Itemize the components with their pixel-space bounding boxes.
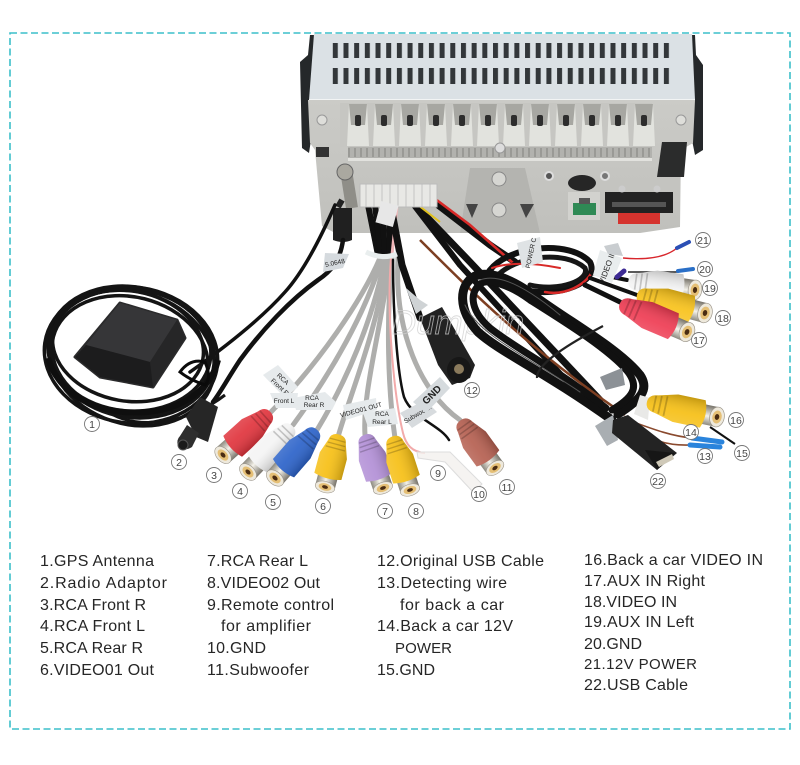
callout 11: 11: [502, 482, 513, 494]
callout 12: [464, 382, 480, 398]
GPS antenna: [32, 269, 232, 447]
rear panel: [308, 100, 695, 233]
legend column 3: 13.Detecting wire: [377, 575, 507, 592]
tag: RCA Rear R: [293, 392, 336, 410]
watermark: Dumpkin: [392, 304, 524, 342]
black ISO connector: [605, 186, 673, 224]
RCA plug: video 02: [379, 432, 425, 500]
callout 12: 12: [466, 385, 478, 397]
upper small cable loop: [490, 248, 637, 302]
tag: GND: GND: [421, 384, 444, 407]
legend column 4: 16.Back a car VIDEO IN: [584, 552, 763, 569]
callout 1: [84, 416, 100, 432]
tag: RCA Front L: Front L: [274, 398, 295, 405]
label: lead tag: 5.0648: [325, 258, 346, 269]
legend column 4: 18.VIDEO IN: [584, 594, 677, 611]
legend column 2: 8.VIDEO02 Out: [207, 575, 321, 592]
tag: RCA Rear R: RCA: [305, 395, 320, 402]
tag: VIDEO01 Out: VIDEO01 OUT: [339, 402, 383, 419]
legend column 1: 1.GPS Antenna: [40, 553, 154, 570]
tag: RCA Front R: Front R: [269, 377, 290, 398]
legend column 3: 12.Original USB Cable: [377, 553, 544, 570]
callout 14: 14: [685, 427, 697, 439]
callout 10: [472, 486, 486, 502]
side bracket right: [690, 35, 703, 155]
black harness from white connector: [368, 205, 397, 255]
callout 2: [172, 454, 186, 470]
RCA plug: front R: [209, 402, 280, 470]
cable coil: [32, 269, 232, 447]
tag: Subwoofer: [400, 400, 437, 428]
USB female connector: [612, 415, 677, 470]
legend column 2: 9.Remote control: [207, 597, 334, 614]
callout 17: [692, 332, 706, 348]
callout 3: 3: [211, 470, 217, 482]
cable tags on RCA leads: [263, 365, 437, 428]
callout 18: [716, 310, 730, 326]
callout 3: [206, 468, 222, 482]
legend column 2: 10.GND: [207, 640, 266, 657]
back-car wire 14: [628, 420, 722, 442]
callout 19: 19: [704, 283, 716, 295]
side bracket left: [300, 35, 314, 153]
radio adaptor plug: [177, 397, 218, 450]
red 12V wire: [623, 242, 689, 259]
back-car wire 13: [630, 425, 720, 447]
tag: RCA Front R: [263, 365, 298, 398]
RCA plug: AUX left: [627, 267, 704, 305]
legend column 3: for back a car: [400, 597, 505, 614]
tag: lower gray 2: [595, 415, 618, 446]
legend column 3: POWER: [395, 640, 452, 657]
legend column 4: 21.12V POWER: [584, 656, 697, 673]
tag: GND: [413, 377, 450, 413]
right harness: [405, 195, 625, 415]
callout 9: [430, 466, 446, 480]
callout 22: [650, 474, 666, 488]
wires behind the loops: [270, 195, 625, 453]
legend column 3: 14.Back a car 12V: [377, 618, 513, 635]
tag: RCA Rear L: Rear L: [372, 419, 392, 426]
number callouts: [84, 232, 750, 518]
RCA plug: video 01: [310, 431, 353, 496]
original USB cable: [392, 212, 420, 318]
callout 22: 22: [652, 476, 664, 488]
callout 1: 1: [89, 419, 95, 431]
legend column 1: 4.RCA Front L: [40, 618, 145, 635]
callout 7: 7: [382, 506, 388, 518]
callout 8: [408, 504, 424, 518]
RCA plug: video in: [633, 281, 716, 328]
RCA plug: front L: [233, 416, 303, 486]
legend column 1: [40, 553, 168, 679]
tag: small upper: [604, 243, 623, 256]
tag: RCA Front L: [270, 393, 298, 408]
tag: POWER: [517, 237, 543, 269]
legend column 2: for amplifier: [221, 618, 312, 635]
callout 11: [500, 480, 514, 494]
legend column 1: 5.RCA Rear R: [40, 640, 143, 657]
legend column 2: 7.RCA Rear L: [207, 553, 308, 570]
legend column 4: 22.USB Cable: [584, 677, 688, 694]
callout 15: [734, 446, 750, 460]
cable: GPS antenna lead: [190, 205, 335, 372]
callout 6: [316, 498, 330, 514]
zip tie on bundle: [366, 252, 397, 257]
RCA plug: rear R: [260, 421, 328, 492]
RCA plug: AUX right: [614, 291, 699, 348]
legend column 4: 17.AUX IN Right: [584, 573, 706, 590]
legend column 4: 20.GND: [584, 636, 642, 653]
legend column 1: 3.RCA Front R: [40, 597, 146, 614]
cable: radio adaptor lead: [213, 240, 343, 402]
callout 20: [698, 262, 712, 276]
white wiring connector: [360, 184, 437, 227]
callout 6: 6: [320, 501, 326, 513]
callout 18: 18: [717, 313, 729, 325]
callout 16: [728, 412, 744, 428]
callout 4: [232, 484, 248, 498]
black GND wire: [617, 269, 693, 277]
black wire 15: [710, 427, 735, 444]
tag: RCA Rear R: Rear R: [304, 402, 325, 409]
callout 15: 15: [736, 448, 748, 460]
callout 8: 8: [413, 506, 419, 518]
cable tie: [180, 361, 208, 385]
tag: POWER: POWER C: [525, 237, 538, 269]
callout 20: 20: [699, 264, 711, 276]
tag: RCA Rear L: [363, 408, 398, 427]
callout 9: 9: [435, 468, 441, 480]
tag: lower gray 1: [600, 368, 625, 390]
thin black wire: [393, 260, 449, 440]
callout 13: [698, 448, 712, 464]
callout 7: [378, 504, 392, 518]
RCA plug: back-car video: [644, 388, 727, 432]
legend column 2: [207, 553, 334, 679]
large black cable loop to USB: [463, 274, 644, 420]
antenna puck: [75, 303, 185, 387]
legend column 1: 6.VIDEO01 Out: [40, 662, 155, 679]
label: lead tag: [323, 253, 349, 272]
RCA plug: subwoofer: [449, 412, 510, 481]
callout 16: 16: [730, 415, 742, 427]
legend column 4: [584, 552, 763, 694]
gray RCA wire bundle: [270, 258, 460, 438]
callout 21: [696, 232, 710, 248]
loop cable tie: [537, 326, 603, 378]
callout 19: [702, 280, 718, 296]
tag: RCA Rear L: RCA: [375, 411, 390, 418]
remote wire terminal: [417, 452, 482, 492]
head unit chassis: [300, 34, 703, 233]
legend column 3: [377, 553, 544, 679]
legend column 2: 11.Subwoofer: [207, 662, 310, 679]
callout 4: 4: [237, 486, 243, 498]
coax antenna socket and cable ends: [333, 164, 353, 242]
tag: VIDEO IN: VIDEO IN: [597, 249, 618, 285]
antenna socket hole: [568, 175, 596, 191]
top lid with vents: [309, 34, 695, 100]
callout 13: 13: [699, 451, 711, 463]
callout 10: 10: [473, 489, 485, 501]
legend column 4: 19.AUX IN Left: [584, 614, 695, 631]
tag: Subwoofer: Subwoofer: [403, 403, 434, 425]
callout 21: 21: [697, 235, 709, 247]
lower coil strands in front of puck: [48, 358, 218, 413]
callout 17: 17: [693, 335, 705, 347]
black pad: [657, 142, 687, 177]
USB connector 12: [406, 288, 475, 385]
callout 2: 2: [176, 457, 182, 469]
RCA plug: rear L: [351, 430, 398, 498]
tag: white lower: [634, 395, 650, 420]
pink remote wire: [390, 258, 425, 453]
legend column 1: 2.Radio Adaptor: [40, 575, 168, 592]
callout 5: [266, 494, 280, 510]
small tags on loops: [517, 237, 650, 446]
tag: RCA Front R: RCA: [275, 372, 290, 387]
callout 5: 5: [270, 497, 276, 509]
green connector: [568, 192, 600, 220]
right side short wires: [617, 242, 735, 447]
legend column 3: 15.GND: [377, 662, 435, 679]
callout 14: [684, 424, 698, 440]
